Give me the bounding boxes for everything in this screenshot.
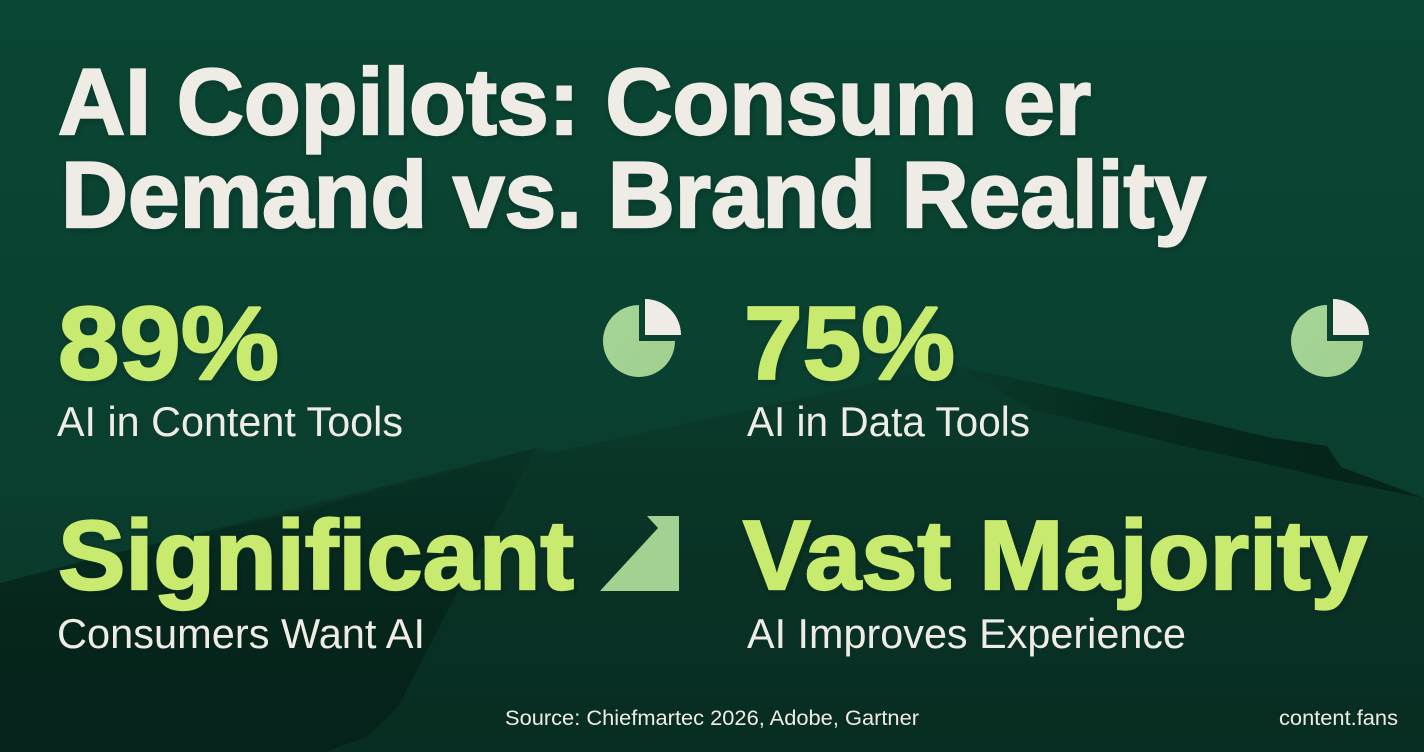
title: AI Copilots: Consum er [58, 49, 1091, 154]
label: AI in Data Tools: AI in Data Tools [747, 398, 1030, 445]
icon: pie chart left [603, 299, 681, 377]
label: Consumers Want AI: Consumers Want AI [57, 610, 425, 657]
value: Significant: Significant [58, 500, 574, 610]
label: AI Improves Experience: AI Improves Experience [747, 610, 1186, 657]
value: Vast Majority: Vast Majority [743, 500, 1367, 610]
icon: pie chart right [1291, 299, 1369, 377]
icon: rising arrow [600, 516, 679, 591]
label: AI in Content Tools: AI in Content Tools [57, 398, 403, 445]
value: 89%: 89% [58, 286, 279, 402]
stat: 89% AI in Content Tools [57, 286, 403, 445]
brand: content.fans: content.fans [1279, 707, 1398, 730]
title: Demand vs. Brand Reality [61, 142, 1206, 247]
source note: Source: Chiefmartec 2026, Adobe, Gartner [505, 707, 919, 730]
stat: Vast Majority AI Improves Experience [743, 500, 1367, 657]
stat: Significant Consumers Want AI [57, 500, 574, 657]
value: 75%: 75% [744, 286, 955, 402]
stat: 75% AI in Data Tools [744, 286, 1030, 445]
title [58, 49, 1206, 247]
